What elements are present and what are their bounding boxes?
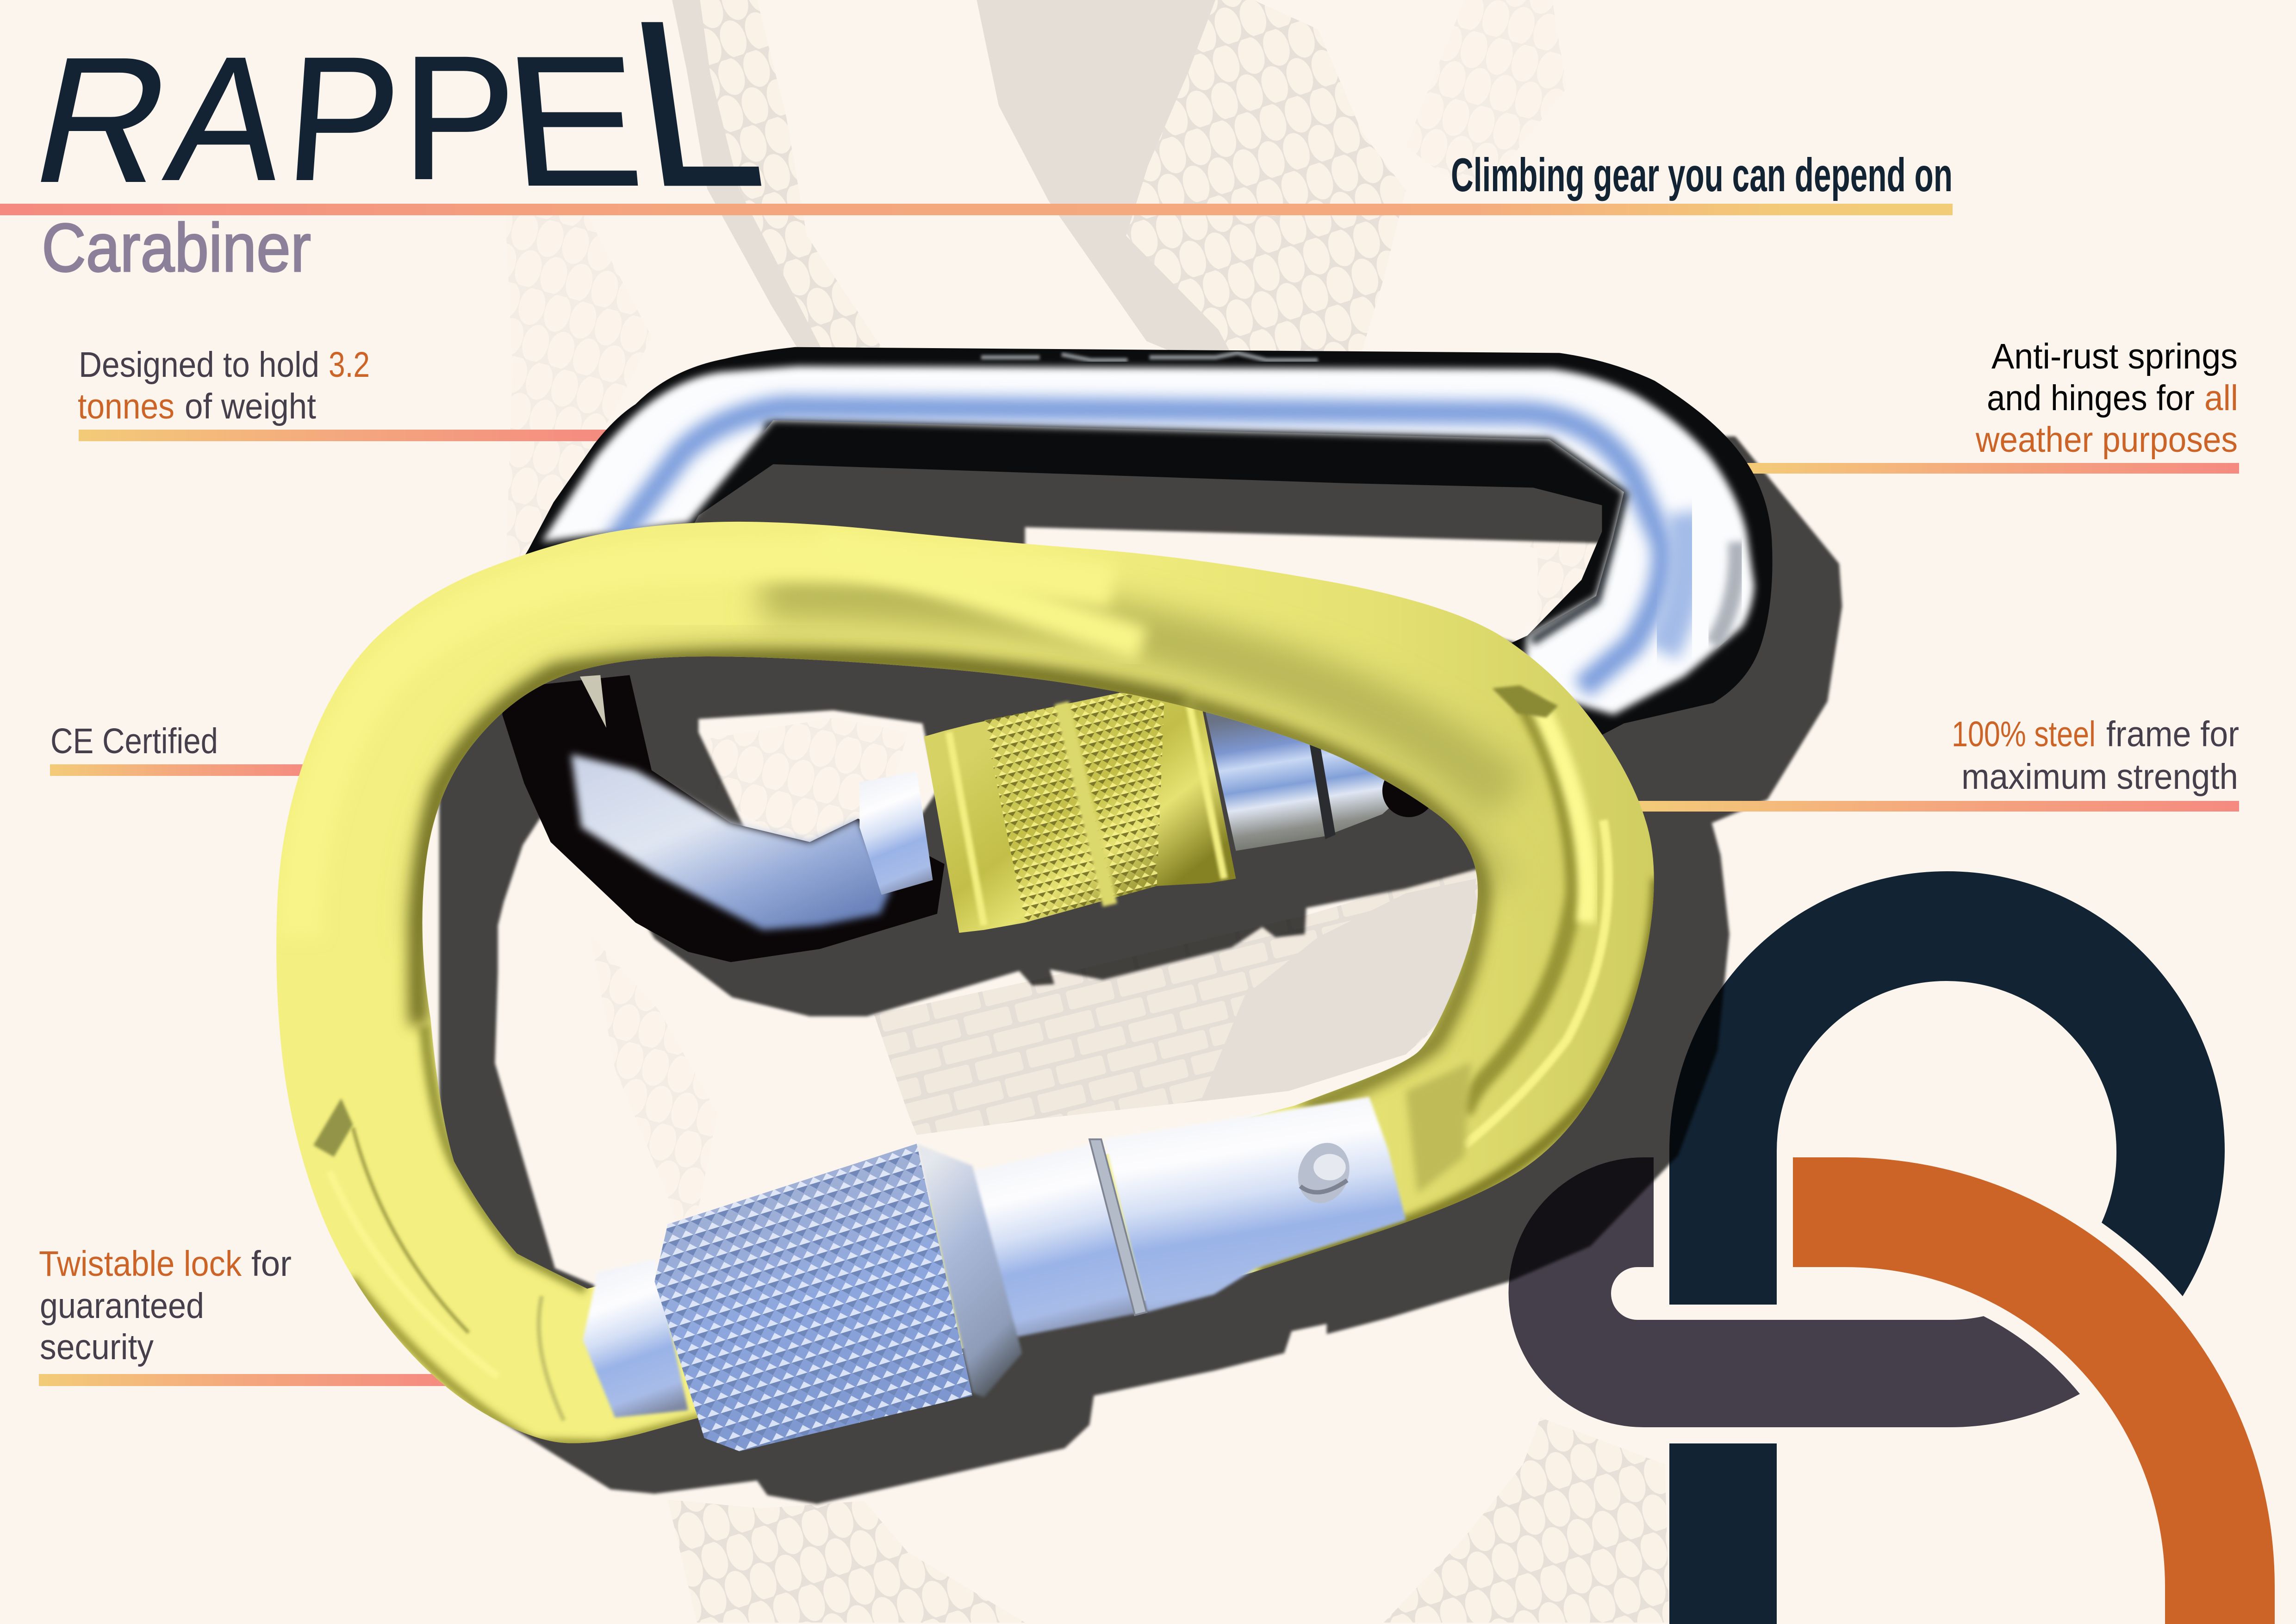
- top divider bar: [0, 204, 1953, 215]
- text block: twistable lock: security: [40, 1327, 154, 1367]
- background rope texture: [505, 0, 1669, 1623]
- title: A: [157, 20, 298, 217]
- screw gate: knurled locking sleeve: [583, 1097, 1406, 1451]
- text block: twistable lock: for: [251, 1244, 292, 1284]
- silver frame dark rim: [498, 347, 1773, 776]
- logo strand: navy lower stem: [1669, 1443, 1777, 1624]
- text block: anti-rust springs: [1975, 337, 2238, 460]
- gate locking cylinder: [1104, 1097, 1406, 1312]
- gate rivet: [1290, 1136, 1358, 1211]
- callout bar: anti-rust: [1747, 463, 2239, 474]
- text block: load rating: Designed to hold: [79, 345, 319, 385]
- text block: load rating: of weight: [185, 387, 316, 426]
- icon: knotted R logo: [1509, 871, 2275, 1624]
- callout bar: steel frame: [1638, 801, 2239, 812]
- text block: load rating: [78, 345, 370, 426]
- gold frame shading: [300, 545, 1658, 1444]
- logo strand: purple loop: [1509, 1157, 2080, 1427]
- gold frame: [276, 522, 1654, 1443]
- title: P: [402, 19, 516, 216]
- text block: twistable lock: guaranteed: [40, 1286, 204, 1326]
- subtitle: Carabiner: [42, 210, 311, 286]
- text block: load rating: tonnes: [78, 387, 174, 426]
- silver hook bright tip: [580, 675, 606, 728]
- silver hook steel face: [571, 754, 890, 930]
- title: E: [498, 18, 649, 225]
- logo strand: orange arc: [1793, 1157, 2275, 1624]
- gold carabiner: [276, 522, 1658, 1444]
- text block: twistable lock: [39, 1244, 292, 1367]
- gate smooth cylinder: [959, 1144, 1144, 1337]
- text block: anti-rust springs: and hinges for: [1987, 378, 2195, 418]
- gate collar: [917, 1144, 1022, 1397]
- silver hook dark underside: [502, 675, 945, 962]
- silver frame engraved marks: [981, 353, 1318, 360]
- silver gate knurled brass collar: [924, 693, 1236, 933]
- silver frame steel face: [542, 353, 1754, 715]
- title: R: [19, 20, 187, 219]
- title: P: [280, 20, 406, 217]
- silver carabiner: [498, 347, 1773, 962]
- text block: load rating: 3.2: [329, 345, 370, 385]
- gate ring: [1089, 1139, 1146, 1315]
- text block: steel frame: 100% steel: [1952, 714, 2096, 754]
- gold frame top notch: [1492, 685, 1558, 718]
- logo strand: navy arch: [1669, 871, 2225, 1305]
- text block: twistable lock: Twistable lock: [39, 1244, 242, 1284]
- gold frame lower-left notch: [313, 1098, 564, 1420]
- text block: anti-rust springs: weather purposes: [1975, 420, 2238, 460]
- gate end pin: [583, 1259, 688, 1418]
- carabiner drop shadow: [439, 437, 1842, 1504]
- title: [19, 0, 775, 236]
- silver gate pin: [859, 772, 933, 895]
- text block: steel frame: frame for: [2106, 714, 2239, 754]
- text block: anti-rust springs: all: [2204, 378, 2238, 418]
- tagline: Climbing gear you can depend on: [1451, 149, 1953, 201]
- text block: CE certified: CE Certified: [50, 721, 218, 761]
- text block: steel frame: [1952, 714, 2239, 797]
- callout bar: CE certified: [50, 764, 314, 776]
- text block: anti-rust springs: Anti-rust springs: [1991, 337, 2238, 376]
- silver gate steel sleeve: [1205, 710, 1435, 851]
- callout bar: load rating: [79, 430, 616, 441]
- text block: steel frame: maximum strength: [1961, 757, 2238, 797]
- callout bar: twistable lock: [39, 1374, 451, 1386]
- gate knurled grip: [654, 1144, 972, 1451]
